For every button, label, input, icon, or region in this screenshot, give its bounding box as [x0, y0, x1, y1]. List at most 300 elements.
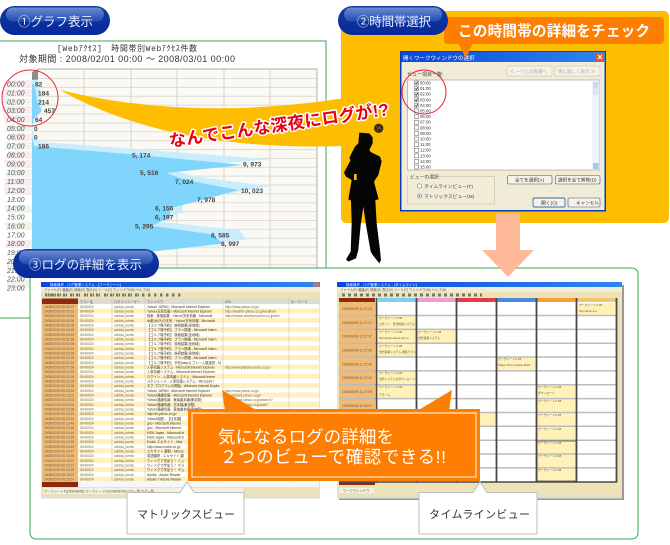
screenshot: matrix view: ファイル(F) 編集(E) 検索(S) 表示(V) ツール(T) ウィンドウ(W) ヘルプ(H)	[44, 287, 150, 292]
log rows: uchida_kenta	[114, 380, 134, 384]
dialog window: 開く(O)	[541, 200, 558, 206]
time cell labels: 2008/08/06 11:27:42	[342, 362, 372, 366]
log rows: SK40024	[80, 333, 94, 337]
log rows: 2008/02/02 00:02:19	[44, 347, 74, 351]
log rows: uchida_kenta	[114, 450, 134, 454]
log rows: 2008/02/02 00:00:07	[44, 305, 74, 309]
log rows: uchida_kenta	[114, 417, 134, 421]
log rows: MSN Japan - Microsoft In	[147, 436, 184, 440]
log rows: ウィメグで学ぼう！ ミュ	[147, 458, 184, 463]
log rows: 2008/02/02 00:16:14	[44, 478, 74, 482]
callout: two views	[188, 390, 480, 481]
log rows: uchida_kenta	[114, 408, 134, 412]
cell text: ワークシート F:08	[538, 413, 562, 417]
value labels: 6, 197	[155, 215, 174, 222]
log rows: SK40024	[80, 436, 94, 440]
log rows: 2008/02/02 00:13:02	[44, 398, 74, 402]
log rows: SK40024	[80, 440, 94, 444]
screenshot: timeline view: ファイル(F) 編集(E) 検索(S) 表示(V) ツール(T) ウィンドウ(W) ヘルプ(H)	[340, 287, 446, 292]
log rows	[44, 305, 280, 482]
log rows: Yahoo!路線情報 - 東海道本線(東京駅)	[147, 406, 202, 412]
time axis labels: 09:00	[7, 161, 25, 168]
time axis labels: 05:00	[7, 126, 25, 133]
chart period: 対象期間 : 2008/02/01 00:00 〜 2008/03/01 00:00	[19, 53, 235, 64]
log rows: uchida_kenta	[114, 422, 134, 426]
cell text: ワークシート F:08	[379, 344, 403, 348]
cell text: 当代システムのダウンロード	[379, 377, 415, 381]
time axis labels: 13:00	[7, 197, 25, 204]
dialog window: 全てを選択(A)	[515, 177, 544, 184]
time cell labels: 2008/08/06 11:27:37	[342, 335, 372, 339]
log rows: SK40024	[80, 361, 94, 365]
dialog window: タイムラインビュー(T)	[424, 183, 473, 190]
log rows: 2008/02/02 00:02:23	[44, 352, 74, 356]
time axis labels: 08:00	[7, 152, 25, 160]
time axis labels: 11:00	[7, 179, 24, 186]
value labels: 6, 156	[155, 206, 174, 213]
log rows: Yahoo!天気情報 - Microsoft Internet Explorer	[147, 308, 213, 314]
log rows: ウィメグで学ぼう！ ギョ	[147, 467, 184, 472]
log rows: 2008/02/02 00:14:47	[44, 450, 74, 454]
highlighted cells	[378, 303, 615, 481]
log rows: uchida_kenta	[114, 459, 134, 463]
log rows: SK40024	[80, 426, 94, 430]
log rows: SK40024	[80, 398, 94, 402]
log rows: SK40024	[80, 352, 94, 356]
log rows: uchida_kenta	[114, 338, 134, 342]
log rows: 2008/02/02 00:11:29	[44, 370, 74, 374]
log rows: http://transit.yahoo.co.jp/	[225, 394, 261, 398]
log rows: SK40024	[80, 454, 94, 458]
log rows: uchida_kenta	[114, 426, 134, 430]
checkbox list: 11:00	[420, 142, 431, 147]
log rows: uchida_kenta	[114, 431, 134, 435]
dialog window: ビューの選択	[410, 174, 439, 180]
time axis labels: 23:00	[6, 286, 25, 292]
callout: two views: ２つのビューで確認できる!!	[220, 447, 446, 467]
time axis labels: 12:00	[7, 188, 25, 195]
log rows: uchida_kenta	[114, 436, 134, 440]
log rows: 2008/02/02 00:14:29	[44, 440, 74, 444]
cell text: ワークシート F:08	[379, 330, 403, 334]
log rows: uchida_kenta	[114, 366, 134, 370]
heading: step 1	[0, 6, 110, 35]
heading: step 2: ②時間帯選択	[357, 15, 431, 29]
log rows: 2008/02/02 00:12:03	[44, 375, 74, 379]
callout: check this time range	[444, 17, 664, 58]
area chart	[2, 69, 317, 288]
log rows: uchida_kenta	[114, 324, 134, 328]
cell text: アラーム	[379, 393, 390, 397]
log rows: goo - Microsoft Internet	[147, 422, 181, 426]
log rows: SK40024	[80, 370, 94, 374]
time axis labels: 02:00	[7, 99, 25, 106]
log rows: http://weather.yahoo.co.jp/weather/	[225, 310, 276, 314]
log rows: 2008/02/02 00:02:09	[44, 342, 74, 346]
time axis labels: 14:00	[7, 206, 25, 213]
log rows: MSN Japan - Microsoft In	[147, 431, 184, 435]
log rows: uchida_kenta	[114, 389, 134, 393]
value labels: 457	[44, 108, 55, 115]
checkbox list: 06:00	[420, 114, 431, 119]
log rows: uchida_kenta	[114, 305, 134, 309]
log rows: http://www.excite.co.jp/	[147, 445, 181, 449]
log rows: 2008/02/02 00:15:17	[44, 464, 74, 468]
log rows: uchida_kenta	[114, 356, 134, 360]
log rows: SK40024	[80, 422, 94, 426]
value labels: 5, 295	[135, 223, 154, 230]
cell text: ワークシート F:08	[379, 385, 403, 389]
log rows: 2008/02/02 00:13:46	[44, 426, 74, 430]
log rows: http://search.weather.yahoo.co.jp/bin/	[225, 314, 280, 318]
checkbox list: 07:00	[420, 120, 431, 125]
value labels: 214	[38, 99, 49, 106]
highlight circle	[2, 70, 58, 126]
log rows: 2008/02/02 00:14:26	[44, 436, 74, 440]
log rows: uchida_kenta	[114, 384, 134, 388]
checkbox list: 13:00	[420, 153, 431, 158]
cell text: ログイン - 当代情報システム	[379, 322, 415, 326]
time axis labels	[6, 82, 25, 292]
log rows: Yahoo! JAPAN - Microsoft Internet Explorer	[147, 305, 211, 309]
time cell labels: 2008/08/06 11:27:27	[342, 321, 372, 325]
log rows: Yahoo!路線情報 - 日本橋(東京駅)	[147, 402, 195, 407]
log rows: 【ゴルフ場予約】 プラン詳細 - Microsoft Intern	[147, 355, 217, 360]
log rows: 【ゴルフ場予約】 検索結果(全地域)	[147, 332, 200, 337]
log rows: uchida_kenta	[114, 328, 134, 332]
log rows: Adobe - Adobe Reader	[147, 473, 181, 477]
log rows: SK40024	[80, 347, 94, 351]
log rows: ログイン - 人事情報システム - Microsoft Intern	[147, 374, 215, 379]
time axis labels: 16:00	[7, 223, 25, 230]
log rows: http://td.yahoo.co.jp/	[147, 412, 177, 416]
screenshot: matrix view: ログインユーザー	[114, 299, 140, 304]
dialog window: ≪ 一つ上の階層へ	[510, 68, 548, 75]
cell text: 当代情報システム	[418, 336, 440, 340]
log rows: 【ゴルフ場予約】 プラン詳細 - Microsoft Intern	[147, 346, 217, 351]
screenshot: matrix view: キーワード	[291, 299, 307, 304]
time cell labels: 2008/08/06 11:27:47	[342, 376, 372, 380]
dialog window: キャンセル	[576, 200, 599, 206]
cell text: http://login.net	[579, 309, 597, 313]
time axis labels: 20:00	[6, 259, 25, 266]
log rows: Yahoo!路線情報 - Microsoft Internet Explorer	[147, 392, 213, 398]
log rows: 2008/02/02 00:02:31	[44, 361, 74, 365]
heading: step 1: ①グラフ表示	[18, 15, 93, 29]
panel: time selection	[341, 11, 669, 223]
log rows: エキサイト 翻訳 - Micros	[147, 448, 184, 454]
value labels	[34, 82, 263, 248]
screenshot: matrix view	[41, 282, 320, 498]
dialog window: マトリックスビュー(M)	[424, 193, 475, 200]
log rows: uchida_kenta	[114, 319, 134, 323]
log rows: SK40024	[80, 338, 94, 342]
screenshot: timeline view: 検索操作 - ログ管理システム - [タイムライン]	[346, 282, 417, 287]
log rows: uchida_kenta	[114, 342, 134, 346]
log rows: 水都(水戸)の天気 - Yahoo!天気情報 - Microsoft	[147, 318, 215, 323]
log rows: 2008/02/02 00:13:04	[44, 403, 74, 407]
label: timeline view: タイムラインビュー	[429, 508, 530, 521]
log rows: ウィメグで学ぼう！ ギョ	[147, 462, 184, 468]
value labels: 186	[38, 144, 49, 151]
value labels: 8, 997	[221, 241, 240, 248]
icon: thinking businessman	[344, 124, 383, 263]
chart title: [Webｱｸｾｽ] 時間帯別Webｱｸｾｽ件数	[57, 43, 197, 54]
log rows: uchida_kenta	[114, 347, 134, 351]
time cell labels: 2008/08/06 11:27:39	[342, 348, 372, 352]
log rows: 2008/02/02 00:00:34	[44, 314, 74, 318]
value labels: 7, 978	[197, 197, 216, 204]
speech bubble	[60, 90, 390, 151]
log rows: SK40024	[80, 417, 94, 421]
log rows: 2008/02/02 00:12:29	[44, 380, 74, 384]
time axis labels: 07:00	[7, 144, 25, 151]
cell text: 当代情報システム 閲覧テスト	[379, 350, 416, 354]
label: matrix view: マトリックスビュー	[137, 508, 235, 521]
log rows: SK40024	[80, 310, 94, 314]
time axis labels: 22:00	[6, 277, 25, 284]
log rows: 【ゴルフ場予約】 検索結果(全地域)	[147, 350, 200, 356]
log rows: SK40024	[80, 356, 94, 360]
log rows: Adobe ? Adobe Reader	[147, 478, 182, 482]
cell text: ワークシート F:08	[498, 357, 522, 361]
log rows: SK40024	[80, 366, 94, 370]
log rows: 2008/02/02 00:13:05	[44, 408, 74, 412]
log rows: 【ゴルフ場予約】 予約(step1) プレー人数選択 - M	[147, 360, 221, 365]
log rows: 2008/02/02 00:00:42	[44, 333, 74, 337]
checkbox list: 03:00	[420, 97, 431, 102]
log rows: SK40024	[80, 459, 94, 463]
log rows: 2008/02/02 00:13:01	[44, 389, 74, 393]
checkbox list: 02:00	[420, 92, 431, 97]
checkbox list: 05:00	[420, 108, 431, 114]
log rows: uchida_kenta	[114, 394, 134, 398]
checkbox list: 09:00	[420, 131, 431, 136]
screenshot: matrix view: 検索操作 - ログ管理システム - [ワークシート]	[50, 282, 121, 287]
log rows: 2008/02/02 00:13:10	[44, 412, 74, 416]
panel: graph	[0, 41, 326, 318]
time axis labels: 15:00	[7, 215, 25, 222]
log rows: 2008/02/02 00:13:24	[44, 417, 74, 421]
log rows: 2008/02/02 00:13:01	[44, 394, 74, 398]
value labels: 9, 973	[243, 161, 262, 168]
dialog window: 開くワークウィンドウの選択	[403, 54, 475, 62]
log rows: SK40024	[80, 445, 94, 449]
checkbox list: 08:00	[420, 125, 431, 130]
log rows: SK40024	[80, 394, 94, 398]
log rows: SK40024	[80, 412, 94, 416]
cell text: Player Drive Update 8023	[498, 363, 530, 367]
cell text: ワークシート F:08	[538, 399, 562, 403]
log rows: 英語翻訳 - エキサイト 翻	[147, 453, 185, 458]
log rows: uchida_kenta	[114, 464, 134, 468]
screenshot: matrix view: ホスト名	[80, 299, 93, 304]
log rows: uchida_kenta	[114, 352, 134, 356]
time axis labels: 04:00	[7, 117, 25, 124]
value labels: 8, 585	[211, 232, 230, 239]
log rows: 2008/02/02 00:01:55	[44, 338, 74, 342]
log rows: 2008/02/02 00:16:07	[44, 473, 74, 477]
log rows: 【ゴルフ場予約】 プラン詳細 - Microsoft Intern	[147, 336, 217, 342]
screenshot: matrix view: ワークシートF(2008/08/06) ワークシートF(2008/08/06) ログ一覧 ログ一覧	[44, 488, 155, 494]
log rows: 2008/02/02 00:00:40	[44, 328, 74, 332]
value labels: 184	[38, 90, 49, 97]
log rows: SK40024	[80, 464, 94, 468]
dialog window	[400, 51, 606, 212]
time axis labels: 10:00	[7, 170, 25, 177]
checkbox list: 12:00	[420, 148, 431, 153]
time axis labels: 00:00	[7, 82, 25, 88]
log rows: 2008/02/02 00:14:40	[44, 445, 74, 449]
panel: log details	[30, 213, 638, 539]
time axis labels: 21:00	[6, 268, 25, 275]
cell text: ワークシート F:08	[538, 427, 562, 431]
log rows: SK40024	[80, 468, 94, 472]
log rows: uchida_kenta	[114, 361, 134, 365]
log rows: http://www.yahoo.co.jp/	[225, 305, 259, 309]
log rows: uchida_kenta	[114, 478, 134, 482]
log rows: SK40024	[80, 324, 94, 328]
log rows: http://transit.yahoo.co.jp/search?	[225, 398, 273, 402]
log rows: タグ プログラムの開始 - Windows Internet Explor	[147, 383, 220, 388]
log rows: Yahoo! JAPAN - Microsoft Internet Explorer	[147, 389, 211, 393]
log rows: uchida_kenta	[114, 314, 134, 318]
time axis labels: 18:00	[7, 241, 25, 248]
value labels: 5, 516	[140, 170, 159, 177]
log rows: SK40024	[80, 478, 94, 482]
log rows: SK40024	[80, 389, 94, 393]
screenshot: matrix view: URL	[225, 300, 232, 304]
screenshot: timeline view	[337, 282, 624, 500]
time axis labels: 17:00	[7, 232, 25, 239]
cell text	[379, 303, 603, 472]
log rows: http://www.jinji/asus.intra.co.jp./	[225, 366, 271, 370]
dialog window: ビュー項目一覧:	[407, 71, 443, 78]
log rows: Yahoo!路線情報 - 東海道本線(東京駅)	[147, 397, 202, 402]
callout: check this time range: この時間帯の詳細をチェック	[458, 22, 650, 40]
cell text: ワークシート F:08	[538, 441, 562, 445]
log rows: uchida_kenta	[114, 473, 134, 477]
log rows: SK40024	[80, 328, 94, 332]
log rows: SK40024	[80, 305, 94, 309]
log rows: uchida_kenta	[114, 454, 134, 458]
log rows: 【ゴルフ場予約】 検索結果(全地域)	[147, 322, 200, 328]
log rows: uchida_kenta	[114, 412, 134, 416]
checkbox list: 15:00	[420, 164, 431, 170]
value labels: 0	[34, 126, 38, 133]
cell text: ワークシート F:08	[379, 371, 403, 375]
log rows: SK40024	[80, 319, 94, 323]
checkbox list	[420, 80, 431, 170]
value labels: 10, 023	[241, 188, 263, 195]
log rows: uchida_kenta	[114, 445, 134, 449]
log rows: uchida_kenta	[114, 370, 134, 374]
cell text: ワークシート F:08	[418, 330, 442, 334]
log rows: 2008/02/02 00:02:29	[44, 356, 74, 360]
value labels: 64	[35, 117, 43, 124]
cell text: http://login.sheet/.net.co	[379, 336, 409, 340]
cell text: ワークシート F:08	[379, 316, 403, 320]
callout: two views: 気になるログの詳細を	[218, 427, 394, 447]
log rows: 2008/02/02 00:15:00	[44, 454, 74, 458]
log rows: 2008/02/02 00:07:59	[44, 366, 74, 370]
log rows: SK40024	[80, 431, 94, 435]
log rows: uchida_kenta	[114, 333, 134, 337]
label: timeline view	[419, 482, 537, 534]
checkbox list: 14:00	[420, 159, 431, 164]
highlight circle	[402, 70, 446, 114]
dialog window: 更に詳しく表示 ≫	[558, 68, 596, 75]
log rows: SK40024	[80, 450, 94, 454]
time cell labels: 2008/08/06 11:27:03	[342, 307, 372, 311]
log rows: http://transit.yahoo.co.jp/exit?	[225, 403, 268, 407]
log rows: 【ゴルフ場予約】 プラン詳細 - Microsoft Intern	[147, 327, 217, 332]
time cell labels: 2008/08/06 11:28:01	[342, 404, 372, 408]
screenshot: matrix view: ウィンドウ	[147, 299, 163, 304]
screenshot: timeline view: ワークウィンドウ	[343, 488, 369, 493]
checkbox list: 04:00	[420, 103, 431, 108]
log rows: 2008/02/02 00:15:07	[44, 459, 74, 463]
log rows: 2008/02/02 00:00:38	[44, 319, 74, 323]
log rows: SK40024	[80, 342, 94, 346]
log rows: http://www.yahoo.co.jp/	[225, 389, 259, 393]
checkbox list: 01:00	[420, 86, 431, 91]
bubble text: なんでこんな深夜にログが!?	[168, 99, 390, 151]
back surface	[32, 80, 270, 258]
time axis labels: 06:00	[7, 135, 25, 142]
log rows: SK40024	[80, 473, 94, 477]
time axis labels: 01:00	[7, 90, 25, 97]
value labels: 7, 024	[175, 179, 194, 186]
cell text: ワークシート F:08	[538, 454, 562, 458]
checkbox list: 00:00	[420, 80, 431, 86]
checkbox list: 10:00	[420, 136, 431, 142]
log rows: uchida_kenta	[114, 398, 134, 402]
log rows: uchida_kenta	[114, 468, 134, 472]
heading: step 2	[338, 6, 448, 35]
value labels: 82	[35, 82, 43, 88]
log rows: SK40024	[80, 375, 94, 379]
label: matrix view	[127, 482, 244, 534]
front surface	[32, 84, 243, 258]
log rows: 2008/02/02 00:00:23	[44, 310, 74, 314]
log rows: 2008/02/02 00:15:25	[44, 468, 74, 472]
heading: step 3: ③ログの詳細を表示	[29, 257, 142, 272]
log rows: 2008/02/02 00:00:39	[44, 324, 74, 328]
log rows: uchida_kenta	[114, 375, 134, 379]
value labels: 5, 174	[132, 152, 151, 160]
time cell labels	[342, 307, 372, 408]
log rows: 人事情報システム - Microsoft Internet Explorer	[147, 364, 216, 370]
log rows: SK40024	[80, 380, 94, 384]
log rows: 人事情報システム - Microsoft Internet Explorer	[147, 369, 216, 374]
time axis labels: 03:00	[7, 108, 25, 115]
time axis labels: 19:00	[7, 250, 25, 257]
log rows: 2008/02/02 00:14:19	[44, 431, 74, 435]
log rows: 検索 - 検索結果 - Yahoo!天気情報 - Microsoft	[147, 313, 212, 318]
log rows: Excite エキサイト - Micr	[147, 439, 183, 444]
log rows: uchida_kenta	[114, 440, 134, 444]
cell text: ワークシート F:08	[538, 468, 562, 472]
down arrow	[482, 213, 534, 277]
cell text: ダウンロード	[538, 391, 555, 395]
log rows: 【ゴルフ場予約】 検索結果(全地域)	[147, 341, 200, 346]
log rows: uchida_kenta	[114, 403, 134, 407]
log rows: goo - Microsoft Internet	[147, 426, 181, 430]
log rows: SK40024	[80, 408, 94, 412]
cell text: ワークシート F:08	[579, 303, 603, 307]
log rows: スケジュール - 人事情報システム - Microsoft I	[147, 378, 214, 384]
